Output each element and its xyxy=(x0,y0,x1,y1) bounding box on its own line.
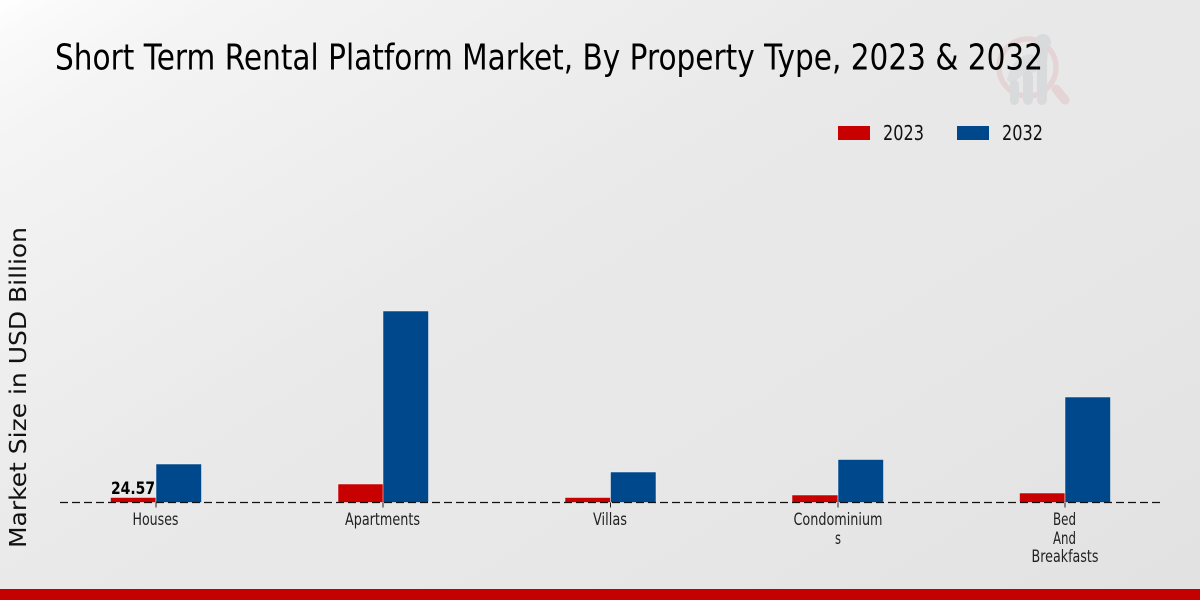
category label: Bed And Breakfasts: Bed xyxy=(1053,510,1076,529)
category label: Bed And Breakfasts: And xyxy=(1053,529,1076,548)
bars: Houses xyxy=(110,464,202,502)
category label: Condominiums: Condominium xyxy=(794,510,882,529)
category label: Bed And Breakfasts xyxy=(1032,510,1098,566)
data label: 24.57: 24.57 xyxy=(111,479,155,499)
category label: Condominiums xyxy=(794,510,882,548)
y axis label: Market Size in USD Billion xyxy=(6,227,32,548)
category label: Apartments: Apartments xyxy=(345,510,420,529)
bars: Apartments xyxy=(338,311,428,502)
axis baseline xyxy=(60,502,1160,504)
bars: Villas xyxy=(565,472,656,502)
bars: Bed And Breakfasts xyxy=(1020,397,1110,502)
legend: 2023 label: 2023 xyxy=(883,121,924,145)
footer bar xyxy=(0,589,1200,600)
legend: 2032 swatch xyxy=(957,126,989,140)
legend: 2023 swatch xyxy=(838,126,870,140)
category label: Villas: Villas xyxy=(593,510,627,529)
bars: Condominiums xyxy=(792,460,884,502)
bar chart xyxy=(60,311,1160,508)
category label: Houses: Houses xyxy=(132,510,178,529)
icon: watermark logo xyxy=(999,34,1065,105)
legend xyxy=(838,121,1043,145)
category label: Condominiums: s xyxy=(835,529,841,548)
category label: Bed And Breakfasts: Breakfasts xyxy=(1032,547,1098,566)
axis ticks xyxy=(156,502,1065,508)
legend: 2032 label: 2032 xyxy=(1002,121,1043,145)
